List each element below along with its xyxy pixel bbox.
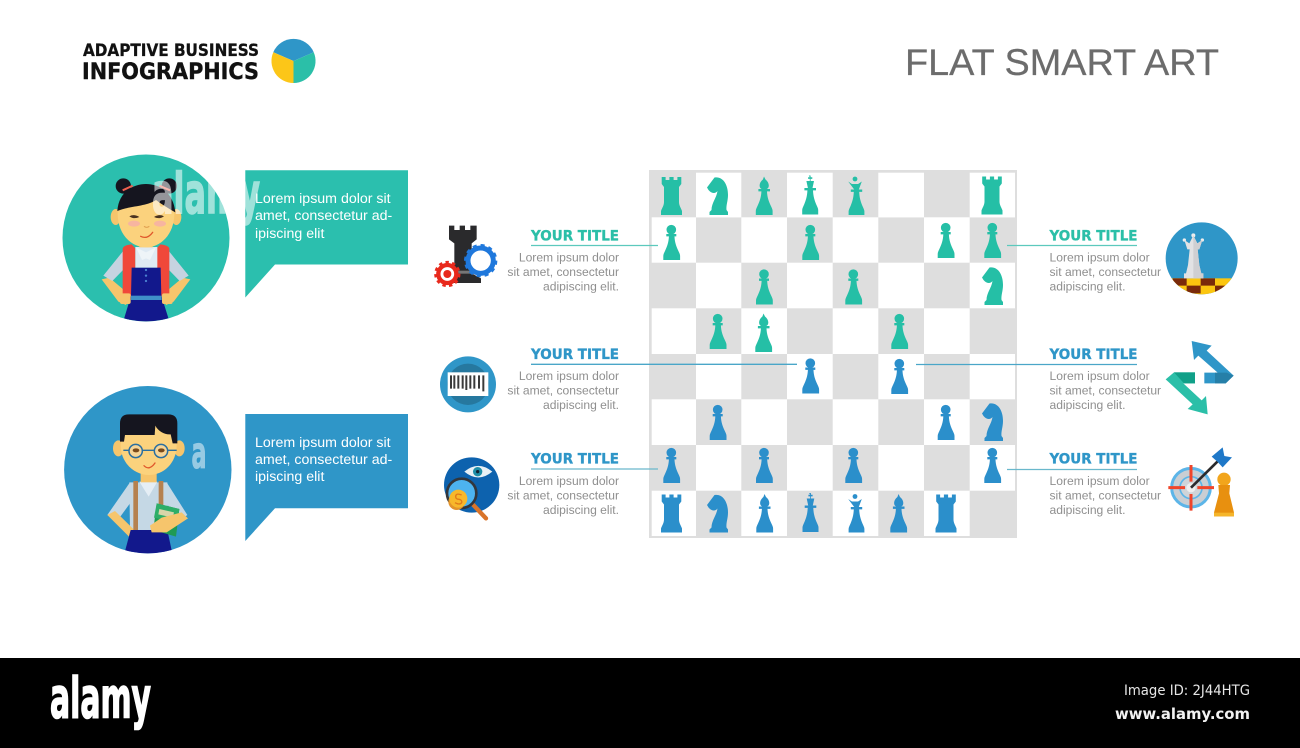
callout: left middle: sit amet, consectetur bbox=[507, 384, 619, 398]
footer bar bbox=[0, 658, 1300, 748]
watermark: alamy large: alamy bbox=[152, 162, 260, 227]
blue chess pieces bbox=[661, 358, 1003, 532]
callout: left top: YOUR TITLE bbox=[530, 228, 619, 244]
callout: left middle: adipiscing elit. bbox=[543, 398, 619, 412]
speech bubble: blue: Lorem ipsum dolor sit bbox=[255, 435, 391, 451]
callout: left top: sit amet, consectetur bbox=[507, 265, 619, 279]
teal chess pieces bbox=[661, 176, 1003, 352]
callout: right middle: Lorem ipsum dolor bbox=[1050, 369, 1150, 383]
image id: Image ID: 2J44HTG bbox=[1124, 683, 1250, 699]
footer logo: alamy bbox=[50, 666, 151, 732]
callout: left bottom: adipiscing elit. bbox=[543, 503, 619, 517]
speech bubble: teal bbox=[245, 170, 408, 298]
callout: left bottom: sit amet, consectetur bbox=[507, 488, 619, 502]
callout: left bottom: Lorem ipsum dolor bbox=[519, 474, 619, 488]
icon: eye and magnifier bbox=[444, 457, 499, 518]
callout: right bottom: YOUR TITLE bbox=[1049, 452, 1138, 468]
callout: left top: adipiscing elit. bbox=[543, 280, 619, 294]
callout: right middle: adipiscing elit. bbox=[1050, 398, 1125, 412]
callout: right middle: YOUR TITLE bbox=[1049, 347, 1138, 363]
callout: right bottom: sit amet, consectetur bbox=[1050, 488, 1161, 502]
speech bubble: teal: ipiscing elit bbox=[255, 226, 324, 242]
panel: boy portrait bbox=[64, 386, 232, 555]
callout: right top: YOUR TITLE bbox=[1049, 228, 1138, 244]
callout: left top bbox=[507, 228, 658, 294]
chess board bbox=[649, 170, 1017, 538]
logo text: ADAPTIVE BUSINESS bbox=[83, 41, 259, 60]
speech bubble: teal: amet, consectetur ad- bbox=[255, 208, 392, 224]
icon: target and pawn bbox=[1168, 447, 1234, 516]
callout: left top: Lorem ipsum dolor bbox=[519, 250, 619, 264]
icon: barcode bbox=[440, 356, 496, 412]
speech bubble: teal: Lorem ipsum dolor sit bbox=[255, 191, 391, 207]
icon: rook with gears bbox=[436, 226, 496, 286]
callout: right top: adipiscing elit. bbox=[1050, 280, 1125, 294]
website: www.alamy.com bbox=[1115, 705, 1250, 723]
callout: left middle bbox=[507, 347, 797, 412]
main title: FLAT SMART ART bbox=[905, 41, 1219, 83]
callout: right middle bbox=[916, 347, 1161, 412]
speech bubble: blue bbox=[245, 414, 408, 541]
speech bubble: blue: amet, consectetur ad- bbox=[255, 452, 392, 468]
logo text: INFOGRAPHICS bbox=[82, 60, 259, 85]
callout: right top bbox=[1007, 228, 1161, 294]
callout: left bottom bbox=[507, 452, 658, 517]
logo pie icon bbox=[271, 39, 316, 83]
callout: right bottom bbox=[1007, 452, 1161, 517]
icon: white queen on board bbox=[1165, 222, 1238, 295]
watermark: a: a bbox=[192, 428, 206, 479]
callout: left bottom: YOUR TITLE bbox=[530, 452, 619, 468]
callout: right bottom: Lorem ipsum dolor bbox=[1050, 474, 1150, 488]
callout: right bottom: adipiscing elit. bbox=[1050, 503, 1125, 517]
logo text bbox=[82, 41, 259, 85]
callout: right middle: sit amet, consectetur bbox=[1050, 384, 1161, 398]
callout: right top: Lorem ipsum dolor bbox=[1050, 250, 1150, 264]
speech bubble: blue: ipiscing elit bbox=[255, 469, 324, 485]
icon: two arrows bbox=[1166, 341, 1234, 414]
callout: left middle: Lorem ipsum dolor bbox=[519, 369, 619, 383]
callout: right top: sit amet, consectetur bbox=[1050, 265, 1161, 279]
panel: girl portrait bbox=[62, 154, 230, 323]
callout: left middle: YOUR TITLE bbox=[530, 347, 619, 363]
